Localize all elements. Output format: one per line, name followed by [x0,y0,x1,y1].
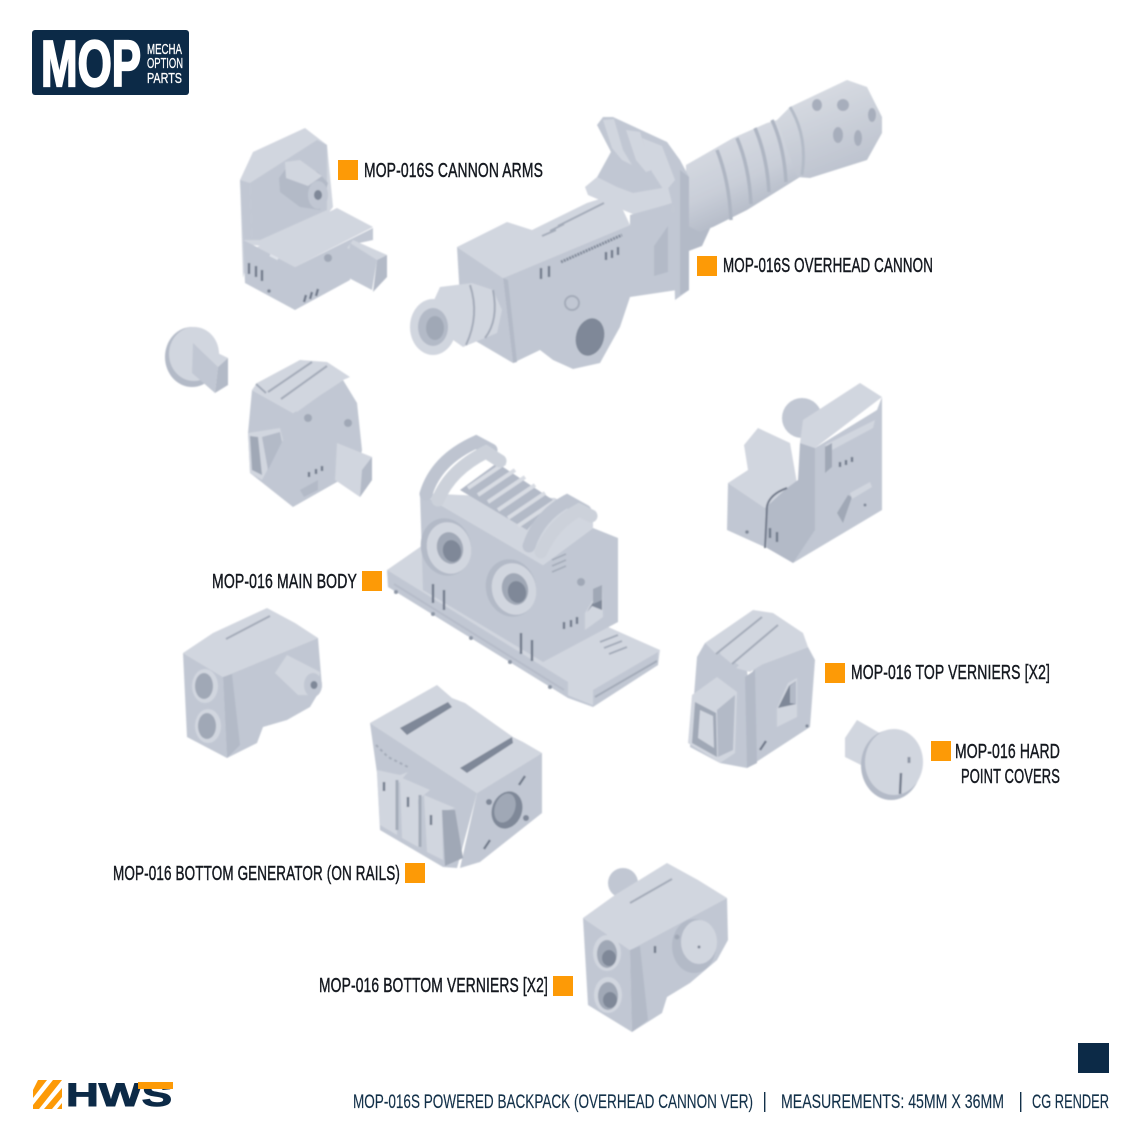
logo: MOP Mecha Option Parts: OPTION [147,55,183,72]
label: hard point covers: POINT COVERS [961,766,1060,788]
part: overhead cannon [410,80,882,369]
part: hard point cover left [165,327,228,393]
footer caption: MEASUREMENTS: 45MM X 36MM [781,1092,1004,1113]
part: cannon arms [240,128,387,310]
label: cannon arms: MOP-016S CANNON ARMS [364,160,543,182]
label: bottom verniers: MOP-016 BOTTOM VERNIERS [X2] [319,975,548,997]
label: hard point covers [931,741,1060,788]
logo: HWS: HWS [66,1077,172,1113]
logo: MOP Mecha Option Parts: MOP [41,27,141,100]
part: top vernier left [248,360,372,507]
part: bottom generator [370,685,542,868]
part: top vernier right [688,610,815,768]
label: top verniers [825,662,1050,684]
label: hard point covers: MOP-016 HARD [955,741,1060,763]
label: main body: MOP-016 MAIN BODY [212,571,357,593]
part: rear vernier left [183,608,322,758]
label: overhead cannon [697,255,933,277]
label: cannon arms [338,160,543,182]
label: top verniers: MOP-016 TOP VERNIERS [X2] [851,662,1050,684]
navy colour swatch [1078,1043,1109,1073]
label: bottom generator: MOP-016 BOTTOM GENERATOR (ON RAILS) [113,863,400,885]
part: right side block [727,383,882,563]
part: bottom vernier [583,863,728,1032]
footer caption: MOP-016S POWERED BACKPACK (OVERHEAD CANNON VER) [353,1092,753,1113]
logo: MOP Mecha Option Parts: PARTS [147,70,182,87]
part: hard point cover right [845,720,923,800]
logo: MOP Mecha Option Parts: MECHA [147,41,182,58]
logo: HWS [33,1077,173,1113]
label: overhead cannon: MOP-016S OVERHEAD CANNON [723,255,933,277]
part: main body [387,442,660,707]
